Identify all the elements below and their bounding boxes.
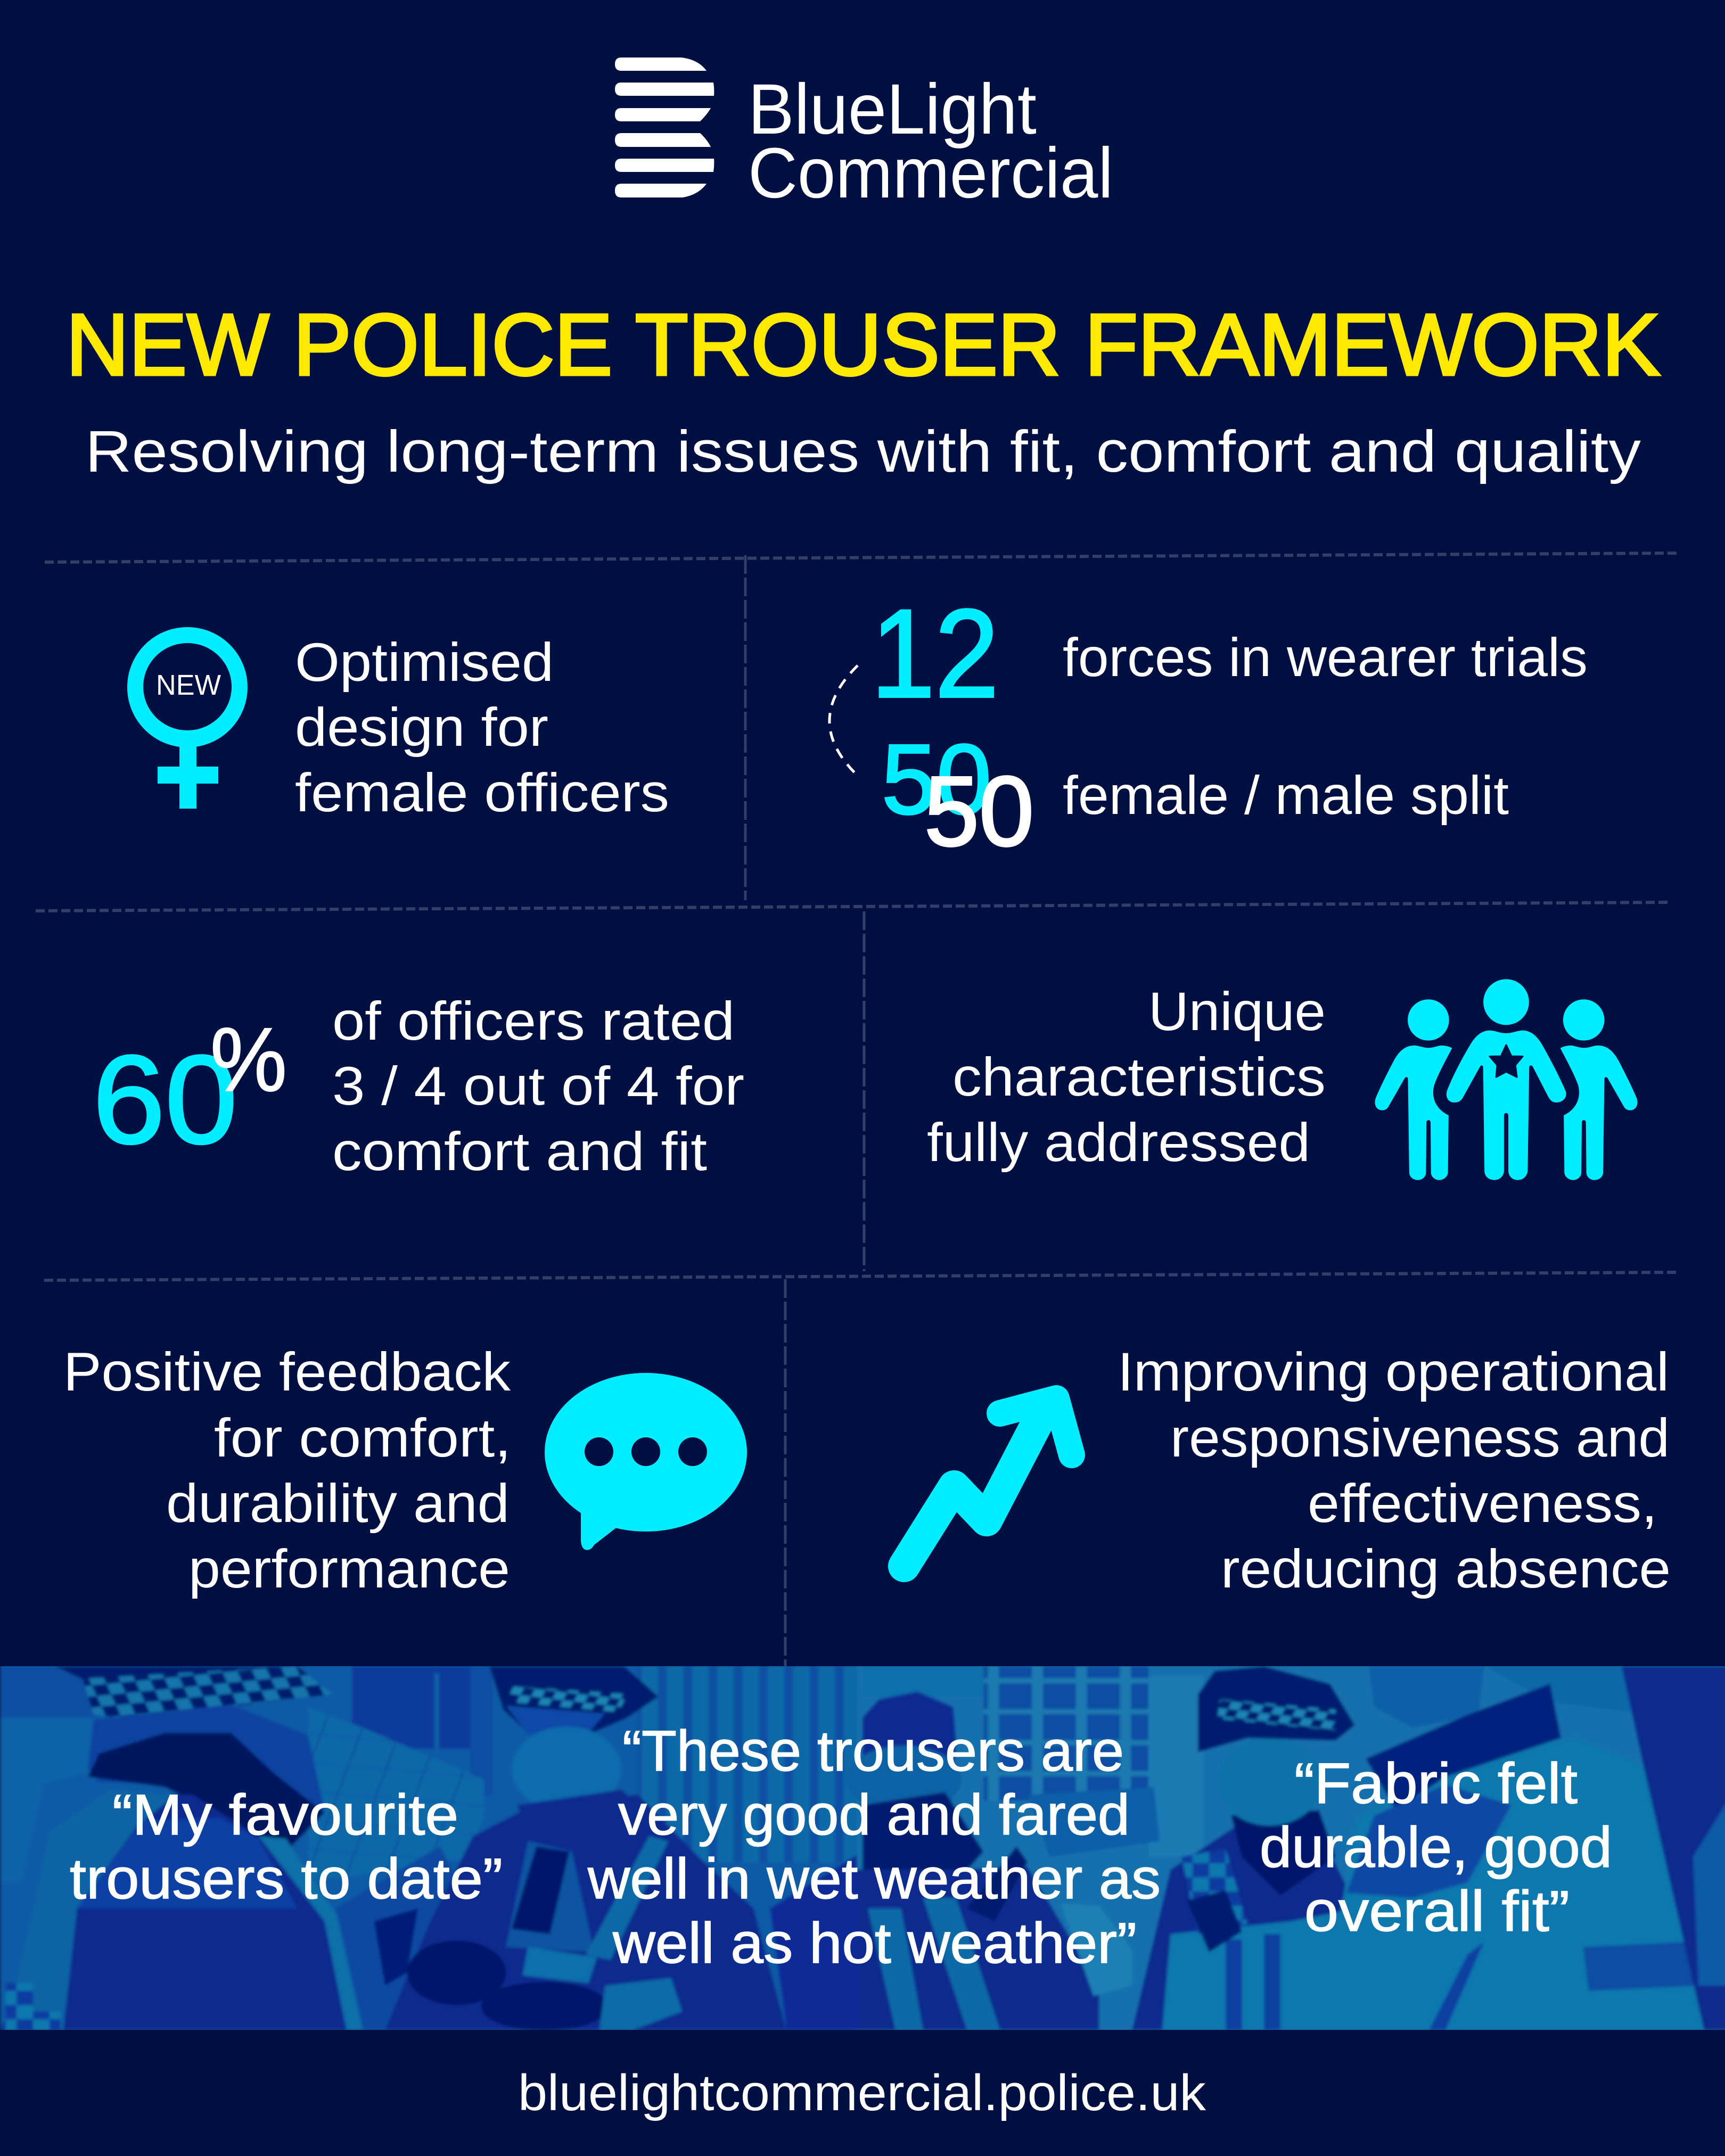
- photo band: police officers with quotes: [0, 1663, 1725, 2032]
- text: improving operational: reducing absence: [1221, 1538, 1671, 1599]
- quote: fabric felt durable: “Fabric felt: [1294, 1751, 1578, 1815]
- text: improving operational: Improving operational: [1118, 1342, 1669, 1402]
- icon: three people with star: [1375, 979, 1637, 1180]
- subtitle: Resolving long-term issues with fit, comfort and quality: [85, 419, 1641, 484]
- text: positive feedback: for comfort,: [214, 1408, 511, 1468]
- quote: my favourite trousers: trousers to date”: [70, 1846, 503, 1911]
- text: positive feedback: durability and: [166, 1473, 510, 1534]
- stat: 60: 60: [93, 1030, 237, 1170]
- stat: 50 cyan: 50: [882, 725, 991, 835]
- quote: these trousers are very good: “These trousers are: [622, 1718, 1124, 1783]
- text: unique characteristics fully addressed: Unique: [1148, 981, 1326, 1042]
- panel: wearer trials stats: [829, 583, 1588, 867]
- icon: female symbol with NEW: NEW: [156, 669, 221, 701]
- text: improving operational: responsiveness and: [1170, 1408, 1670, 1468]
- logo: BlueLight Commercial: [615, 57, 1113, 213]
- text: female / male split: female / male split: [1063, 765, 1509, 826]
- text: improving operational: effectiveness,: [1308, 1473, 1657, 1534]
- text: positive feedback: [63, 1342, 511, 1599]
- text: optimised design for female officers: Optimised: [295, 632, 554, 693]
- quote: fabric felt durable: [1260, 1751, 1612, 1943]
- text: of officers rated: 3 / 4 out of 4 for: [332, 1056, 744, 1116]
- stat: 50 white: 50: [924, 756, 1034, 867]
- text: optimised design for female officers: female officers: [295, 762, 669, 823]
- panel: optimised design: [127, 627, 669, 823]
- text: unique characteristics fully addressed: [927, 981, 1326, 1173]
- quote: my favourite trousers: “My favourite: [112, 1782, 458, 1847]
- quote: fabric felt durable: durable, good: [1260, 1815, 1612, 1879]
- text: of officers rated: comfort and fit: [332, 1121, 707, 1182]
- title: NEW POLICE TROUSER FRAMEWORK: [66, 296, 1660, 393]
- text: unique characteristics fully addressed: fully addressed: [927, 1112, 1310, 1173]
- text: of officers rated: of officers rated: [332, 991, 735, 1051]
- footer url: bluelightcommercial.police.uk: [518, 2064, 1206, 2121]
- quote: my favourite trousers: [70, 1782, 503, 1911]
- quote: these trousers are very good: [587, 1718, 1161, 1975]
- icon: speech bubble: [545, 1373, 747, 1550]
- icon: female symbol with NEW: [127, 627, 248, 809]
- panel: positive feedback: [63, 1342, 747, 1599]
- panel: operational responsiveness: [904, 1342, 1671, 1599]
- quote: these trousers are very good: well in wet weather as: [587, 1846, 1161, 1911]
- logo mark: striped B: [615, 57, 714, 198]
- text: optimised design for female officers: [295, 632, 669, 823]
- icon: rising arrow: [904, 1398, 1072, 1566]
- logo wordmark: [748, 70, 1113, 213]
- stat: percent sign: %: [210, 1009, 287, 1110]
- logo wordmark: BlueLight: [748, 70, 1037, 149]
- text: unique characteristics fully addressed: characteristics: [952, 1047, 1326, 1107]
- text: positive feedback: performance: [188, 1538, 510, 1599]
- panel: 60 percent: [93, 991, 744, 1182]
- text: improving operational: [1118, 1342, 1671, 1599]
- text: positive feedback: Positive feedback: [63, 1342, 511, 1402]
- panel: unique characteristics: [927, 979, 1637, 1180]
- text: of officers rated: [332, 991, 744, 1182]
- photo right half: [846, 1663, 1725, 2032]
- photo left half: [0, 1663, 869, 2032]
- dashed arc: [829, 665, 859, 777]
- quote: fabric felt durable: overall fit”: [1304, 1879, 1570, 1943]
- logo wordmark: Commercial: [748, 134, 1113, 213]
- stat: 12: 12: [871, 583, 999, 724]
- quote: these trousers are very good: very good and fared: [618, 1782, 1130, 1847]
- quote: these trousers are very good: well as hot weather”: [612, 1911, 1137, 1975]
- photo: duotone officers: [0, 1663, 1725, 2032]
- text: forces in wearer trials: forces in wearer trials: [1063, 627, 1588, 688]
- text: optimised design for female officers: design for: [295, 697, 548, 758]
